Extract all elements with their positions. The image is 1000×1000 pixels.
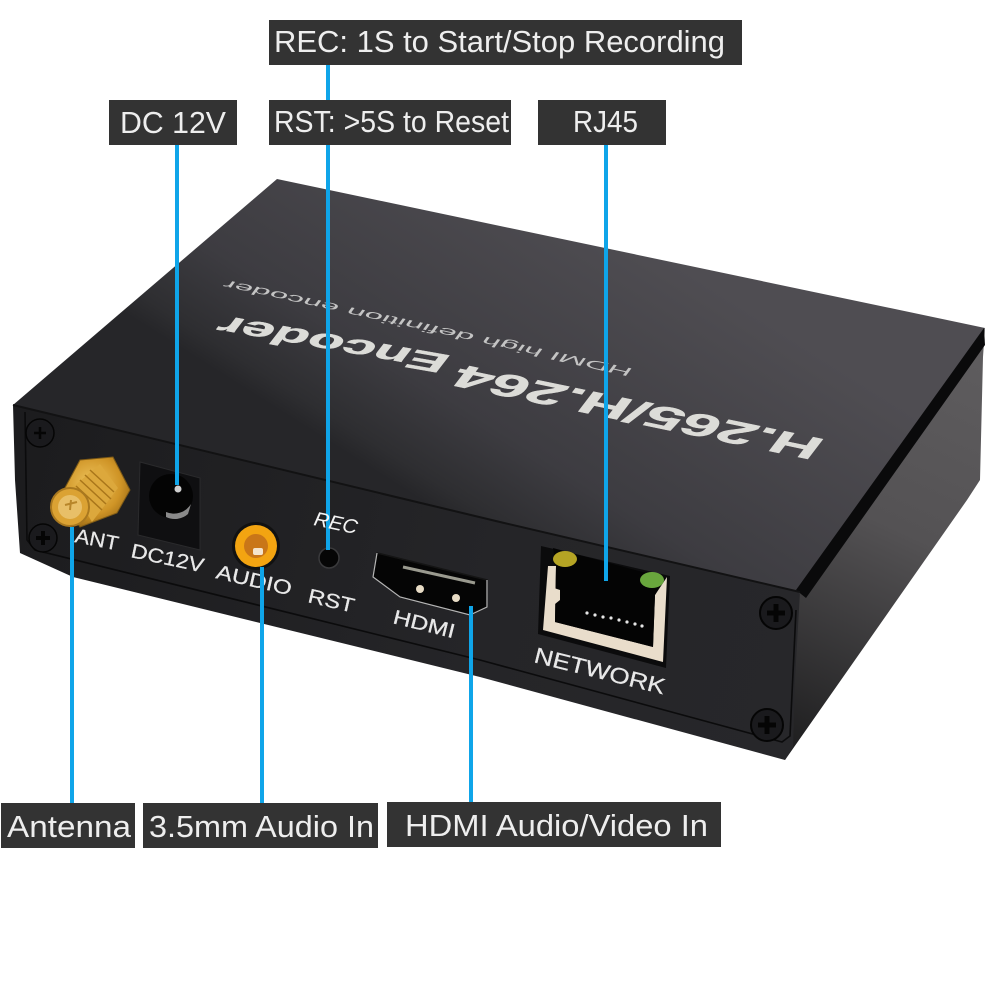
label: Antenna: [1, 803, 135, 848]
top print: product name: Encoder: [208, 311, 457, 378]
right side face: [775, 328, 985, 760]
REC marking: REC: [312, 508, 360, 539]
dark edge between top and side: [796, 328, 985, 598]
icon: HDMI port: [373, 553, 487, 615]
callout lines: [72, 65, 606, 803]
top print: product name: HDMI high definition encoder: [220, 277, 636, 378]
label: RST: RST: >5S to Reset: [274, 104, 509, 139]
port labels printed on panel: HDMI: [391, 607, 457, 643]
icon: RJ45 network port: [538, 546, 670, 668]
label: RJ45: [538, 100, 666, 145]
port labels printed on panel: DC12V: [129, 540, 207, 577]
label: REC: REC: 1S to Start/Stop Recording: [274, 24, 725, 59]
label: HDMI Audio/Video In: [387, 802, 721, 847]
label: Antenna: Antenna: [7, 809, 132, 844]
label: HDMI Audio/Video In: HDMI Audio/Video In: [405, 808, 708, 843]
top print: product name: [208, 277, 832, 465]
label: RJ45: RJ45: [573, 104, 638, 139]
front panel: [13, 405, 800, 760]
top print: product name: H.265/H.264: [444, 358, 832, 465]
port labels printed on panel: RST: [306, 585, 357, 617]
icon: DC power jack: [138, 462, 200, 550]
screws: [26, 419, 792, 741]
port labels printed on panel: NETWORK: [532, 643, 668, 699]
device: encoder box: [13, 179, 985, 760]
icon: antenna connector: [51, 457, 130, 527]
port labels printed on panel: ANT: [73, 525, 120, 555]
label: DC 12V: DC 12V: [120, 105, 226, 140]
icon: audio jack: [232, 522, 280, 570]
port labels printed on panel: AUDIO: [214, 561, 294, 600]
label: 3.5mm Audio In: 3.5mm Audio In: [149, 809, 374, 844]
label: DC 12V: [109, 100, 237, 145]
port labels printed on panel: [73, 525, 668, 699]
top surface: [13, 179, 985, 592]
icon: reset hole: [319, 548, 339, 568]
